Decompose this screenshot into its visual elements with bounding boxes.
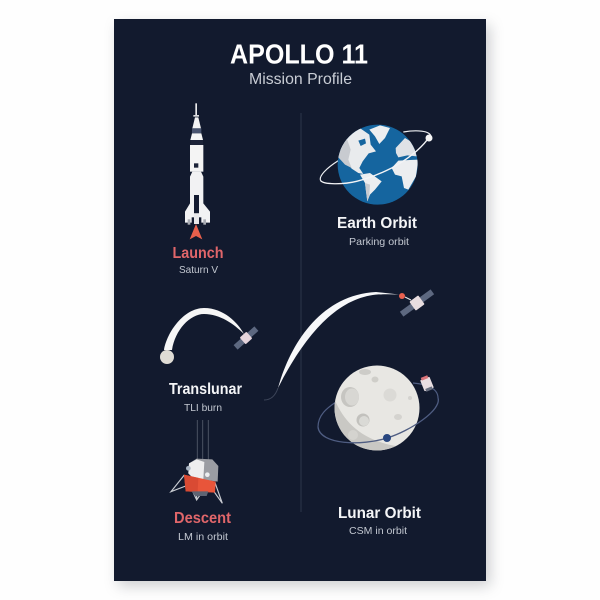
North America	[340, 129, 376, 174]
hatch	[205, 472, 210, 477]
poster panel	[114, 19, 486, 581]
heading: Translunar: Translunar	[169, 381, 242, 398]
Africa	[392, 160, 418, 190]
icon: Earth with orbit	[320, 125, 432, 205]
icon: Saturn V rocket	[185, 103, 210, 239]
heading: Launch: Launch	[172, 245, 224, 262]
orbit front	[321, 140, 427, 184]
rocket flame	[190, 224, 202, 239]
Greenland	[369, 125, 390, 144]
moon shadow	[334, 400, 396, 450]
small Earth	[160, 350, 174, 364]
red marker	[399, 293, 405, 299]
caption: CSM in orbit: CSM in orbit	[349, 525, 407, 537]
heading: Lunar Orbit: Lunar Orbit	[338, 505, 421, 522]
moon disc	[334, 366, 420, 450]
burn arc	[164, 308, 244, 350]
orbit back	[320, 131, 431, 181]
globe	[338, 125, 418, 205]
caption: Saturn V: Saturn V	[179, 264, 218, 276]
center divider	[300, 113, 302, 512]
caption: TLI burn: TLI burn	[184, 402, 222, 414]
orbiting spacecraft dot	[425, 134, 432, 141]
trajectory sweep	[278, 292, 399, 388]
subtitle: Mission Profile	[249, 71, 352, 88]
satellite	[233, 325, 259, 351]
icon: trans-lunar trajectory	[264, 287, 436, 400]
antenna dish	[186, 466, 191, 471]
craters	[341, 387, 359, 407]
descent trails	[197, 420, 208, 460]
heading: Descent: Descent	[174, 510, 231, 527]
icon: translunar arc with satellite	[160, 308, 259, 364]
trajectory tail	[264, 388, 278, 400]
caption: Parking orbit: Parking orbit	[349, 236, 409, 248]
landing legs	[171, 475, 222, 503]
Europe	[396, 138, 417, 157]
caption: LM in orbit: LM in orbit	[178, 531, 228, 543]
South America	[360, 173, 382, 201]
ascent stage	[188, 459, 218, 482]
orbit back	[318, 383, 438, 427]
blue orbit dot	[383, 434, 391, 442]
command service module	[419, 375, 434, 392]
icon: Moon with orbit	[318, 366, 438, 460]
icon: lunar module	[171, 420, 222, 503]
title: APOLLO 11	[230, 38, 368, 70]
heading: Earth Orbit: Earth Orbit	[337, 215, 417, 232]
red descent stage	[184, 475, 216, 493]
satellite	[398, 287, 436, 319]
orbit front	[318, 398, 438, 443]
